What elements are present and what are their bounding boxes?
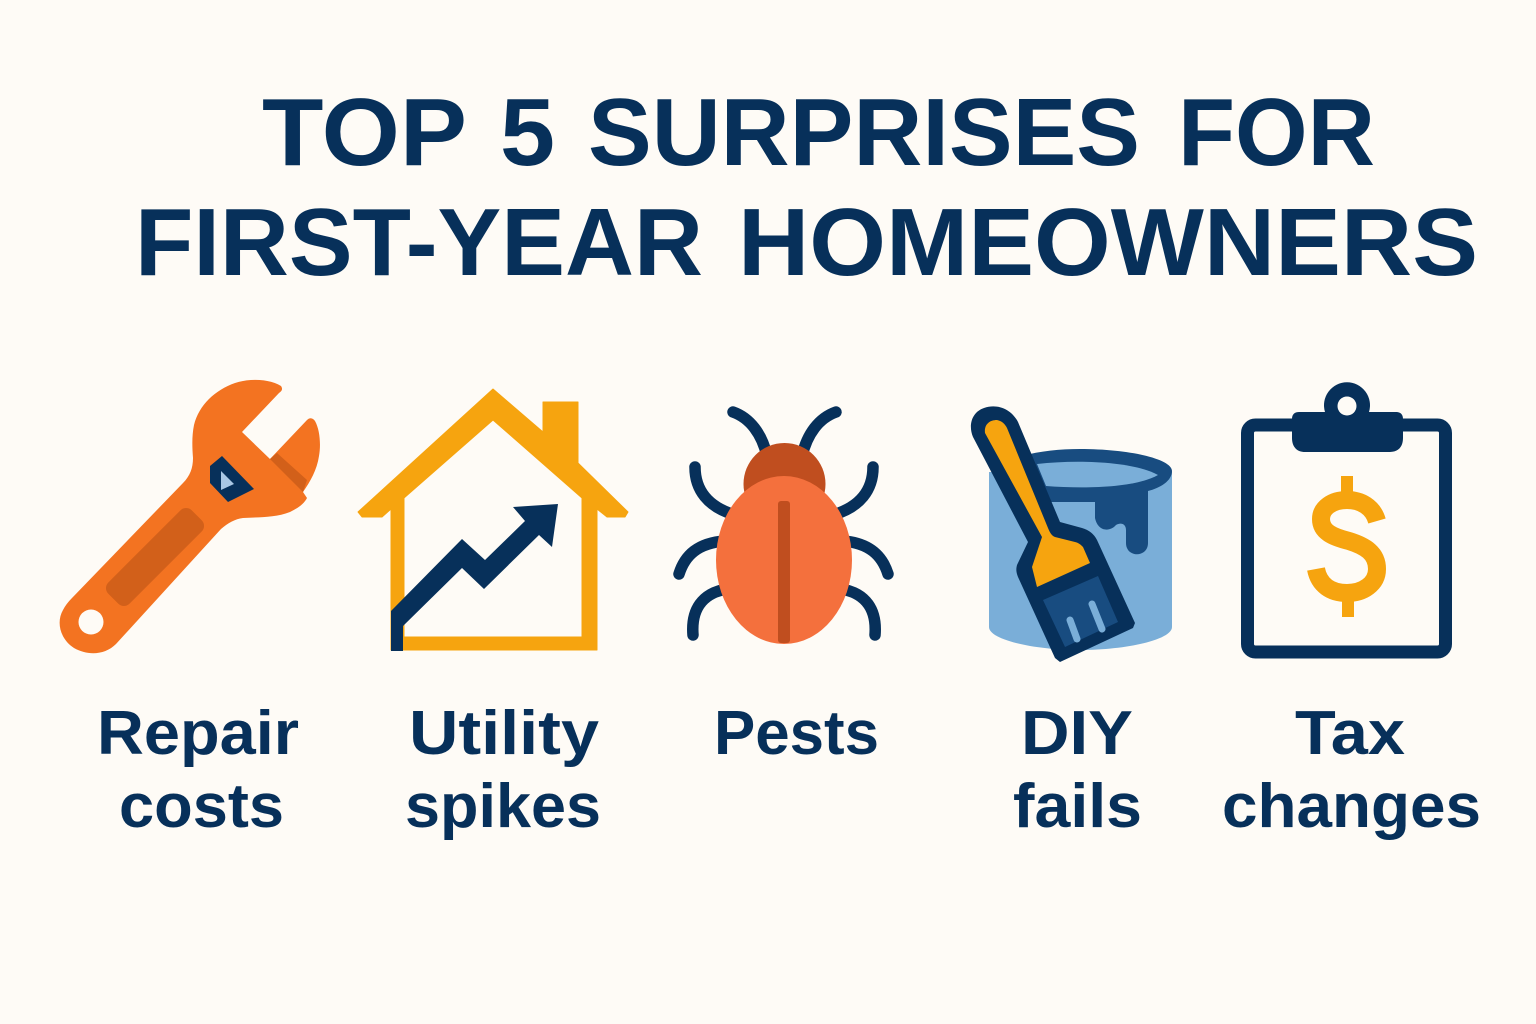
label: tax changes: changes	[1222, 772, 1481, 841]
label: repair costs: costs	[119, 772, 284, 841]
clipboard clip	[1292, 382, 1403, 452]
title: 5	[500, 79, 555, 186]
icon: bug	[679, 412, 888, 644]
title	[135, 79, 1478, 296]
wrench jaw shadow	[270, 453, 307, 492]
label: pests: Pests	[714, 699, 879, 768]
label: utility spikes: Utility	[409, 699, 600, 768]
brush bristles	[1043, 576, 1118, 647]
label: repair costs: Repair	[97, 699, 299, 768]
clipboard board	[1248, 425, 1446, 652]
label: tax changes	[1222, 699, 1481, 841]
icon: clipboard with dollar sign	[1248, 382, 1446, 652]
icon: house with rising arrow	[358, 389, 628, 651]
title: FIRST-YEAR	[135, 189, 703, 296]
label: DIY fails: fails	[1013, 772, 1142, 841]
label: DIY fails	[1013, 699, 1142, 841]
brush outline	[971, 406, 1135, 662]
icon: paint can and brush	[971, 406, 1172, 662]
title: SURPRISES	[588, 79, 1140, 186]
house outline	[358, 389, 628, 650]
label: utility spikes	[405, 699, 601, 841]
label: utility spikes: spikes	[405, 772, 601, 841]
wrench nut	[210, 456, 254, 502]
title: FOR	[1178, 79, 1375, 186]
label: repair costs	[97, 699, 299, 841]
brush handle	[985, 420, 1090, 587]
bug body	[716, 476, 852, 644]
title: TOP	[262, 79, 467, 186]
icon: wrench	[60, 380, 320, 653]
title: HOMEOWNERS	[738, 189, 1478, 296]
label: DIY fails: DIY	[1021, 699, 1133, 768]
wrench handle grip	[103, 505, 207, 609]
wrench hole	[78, 610, 104, 634]
label: tax changes: Tax	[1295, 699, 1406, 768]
can body	[989, 472, 1172, 650]
rising arrow	[391, 504, 558, 651]
bug head	[744, 443, 826, 525]
can rim and drip	[1022, 449, 1172, 554]
dollar sign	[1316, 476, 1377, 617]
